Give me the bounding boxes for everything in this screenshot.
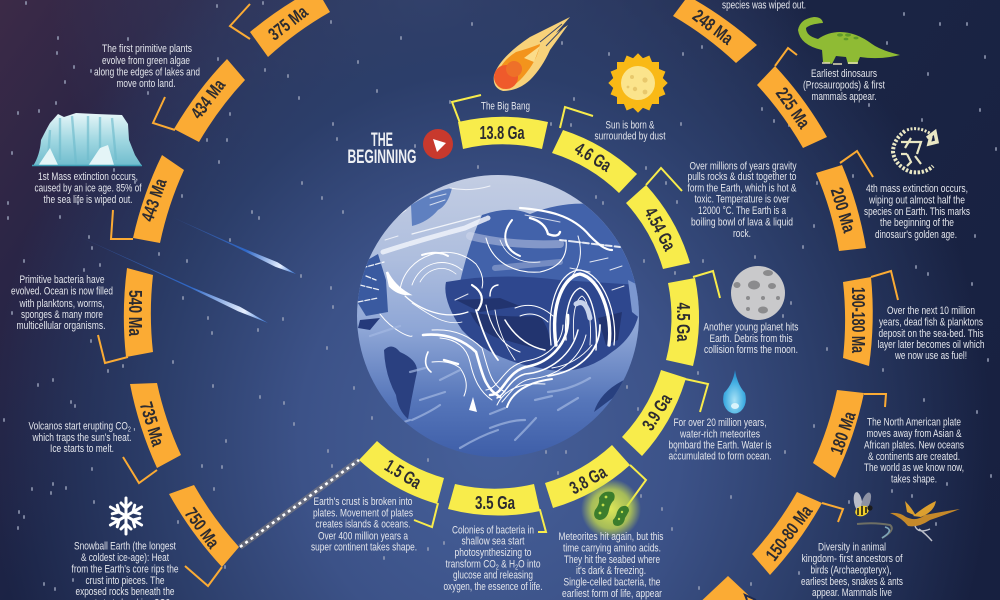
lower ocean cloud streaks (370, 326, 590, 448)
icon: water drop (723, 370, 746, 414)
segment labels (125, 1, 868, 565)
icon: moon (731, 266, 785, 320)
label: 1.5 Ga: 1.5 Ga (381, 455, 425, 493)
text: snowball earth: crust into pieces. The (86, 575, 164, 587)
icon: sun (608, 53, 668, 113)
text: diversity in animal kingdom: kingdom- first ancestors of (802, 553, 903, 565)
text: first mass extinction: caused by an ice age. 85% of (34, 182, 142, 194)
text: earth forms (688, 160, 797, 240)
icon: snowflake (108, 498, 144, 534)
text: primitive bacteria: evolved. Ocean is now filled (11, 286, 113, 298)
text: sun is born (594, 120, 666, 142)
text: crust plates: creates islands & oceans. (316, 518, 410, 530)
title: The Beginning: BEGINNING (348, 147, 416, 168)
label: 735 Ma: 735 Ma (136, 400, 168, 449)
segment: 190-180 Ma (843, 277, 873, 366)
text: crust plates: Over 400 million years a (318, 530, 408, 542)
text: water meteorites (668, 417, 772, 462)
text: diversity in animal kingdom (801, 542, 903, 599)
text: the big bang: The Big Bang (481, 100, 530, 112)
text: colonies of bacteria: 2 (496, 564, 499, 572)
text: colonies of bacteria: Colonies of bacteria in (452, 524, 534, 536)
segment: 3.9 Ga (622, 370, 686, 456)
text: crust plates (311, 496, 417, 554)
text: earliest dinosaurs (803, 68, 885, 103)
text: earliest dinosaurs: Earliest dinosaurs (811, 68, 877, 80)
text: meteorites amino acids: it's dark & freezing. (576, 565, 646, 577)
segment: 180 Ma (813, 390, 864, 478)
text: colonies of bacteria: transform CO (446, 558, 510, 570)
text: meteorites amino acids: earliest form of life, appear (562, 588, 662, 600)
text: fourth mass extinction (864, 183, 970, 241)
icon: play button (423, 129, 453, 159)
text: colonies of bacteria: glucose and releasing (453, 570, 533, 582)
text: north american plate: The world as we know now, (864, 462, 964, 474)
label: 434 Ma: 434 Ma (187, 75, 230, 123)
segment: 443 Ma (133, 155, 184, 243)
text: snowball earth: from the Earth's core rips the (72, 564, 178, 576)
icon: dinosaur fossil (893, 129, 937, 172)
segment: 540 Ma (124, 268, 153, 357)
label: 540 Ma: 540 Ma (125, 290, 145, 337)
label: 3.9 Ga: 3.9 Ga (638, 390, 676, 434)
text: earth forms: pulls rocks & dust together to (688, 171, 796, 183)
text: colonies of bacteria: O into (518, 558, 540, 570)
segment: 4.6 Ga (552, 130, 637, 193)
text: crust plates: Earth's crust is broken into (314, 496, 412, 508)
label: 180 Ma: 180 Ma (826, 408, 860, 457)
text: colonies of bacteria: shallow sea start (462, 536, 524, 548)
icon: snake (857, 523, 892, 538)
clouds and swirls (358, 186, 624, 407)
text: volcanos (28, 420, 136, 455)
text: volcanos: Ice starts to melt. (50, 443, 114, 455)
label: 190-180 Ma: 190-180 Ma (848, 287, 868, 354)
segment: 750 Ma (169, 485, 239, 567)
text: fourth mass extinction: 4th mass extinction occurs, (866, 183, 968, 195)
text: oil deposit: we now use as fuel! (894, 350, 967, 362)
text: earth forms: Over millions of years gravity (690, 160, 797, 172)
text: first mass extinction: the sea life is wiped out. (44, 194, 132, 206)
icon: bee (852, 491, 873, 518)
text: colonies of bacteria: oxygen, the essence of life. (444, 581, 543, 593)
text: first primitive plants: move onto land. (116, 78, 176, 90)
segment: 150-80 Ma (752, 492, 822, 575)
text: earth forms: 12000 °C. The Earth is a (698, 205, 786, 217)
title: The Beginning: THE (371, 130, 393, 151)
dotted connector (240, 460, 359, 547)
label: 248 Ma: 248 Ma (689, 5, 738, 49)
text: fourth mass extinction: dinosaur's golden age. (875, 229, 957, 241)
segment: 248 Ma (673, 0, 757, 63)
icon: dinosaur (798, 17, 900, 64)
text: first mass extinction: 1st Mass extinction occurs, (38, 171, 138, 183)
text: volcanos: 2 (128, 426, 131, 434)
text: meteorites amino acids: They hit the seabed where (564, 554, 660, 566)
label: 3.5 Ga: 3.5 Ga (475, 493, 516, 513)
text: volcanos: Volcanos start erupting CO (28, 420, 158, 432)
text: meteorites amino acids: Single-celled bacteria, the (564, 576, 660, 588)
text: diversity in animal kingdom: birds (Archaeopteryx), (810, 564, 892, 576)
text: water meteorites: water-rich meteorites (679, 428, 760, 440)
label: 4.5 Ga: 4.5 Ga (673, 302, 693, 342)
text: north american plate: The North American plate (867, 416, 961, 428)
orange timeline segments (124, 0, 873, 600)
text: moon forms: Earth. Debris from this (710, 333, 793, 345)
text: north american plate (864, 416, 964, 486)
text: crust plates: super continent takes shape. (311, 542, 417, 554)
label: 13.8 Ga: 13.8 Ga (480, 123, 525, 143)
text: earth forms: rock. (733, 228, 751, 240)
text: first primitive plants: The first primitive plants (102, 43, 192, 55)
text: snowball earth (72, 540, 178, 600)
label: 200 Ma: 200 Ma (827, 185, 860, 236)
icon: iceberg (32, 113, 142, 166)
text: water meteorites: For over 20 million years, (674, 417, 766, 429)
text: first primitive plants: along the edges of lakes and (94, 66, 200, 78)
text: diversity in animal kingdom: Diversity in animal (818, 542, 886, 554)
label: 750 Ma: 750 Ma (181, 504, 224, 553)
text: primitive bacteria (11, 274, 113, 332)
yellow brackets (414, 95, 720, 532)
text: earth forms: boiling bowl of lava & liquid (691, 216, 793, 228)
text: snowball earth: & coldest ice-age): Heat (81, 552, 169, 564)
text: meteorites amino acids: Meteorites hit again, but this (558, 531, 664, 543)
text: volcanos: which traps the sun's heat. (32, 432, 132, 444)
text: first mass extinction (34, 171, 142, 206)
text: fourth mass extinction: wiping out almost half the (868, 194, 965, 206)
segment: 200 Ma (816, 165, 866, 251)
yellow timeline segments (359, 117, 699, 515)
text: earliest dinosaurs: mammals appear. (812, 91, 876, 103)
text: moon forms: collision forms the moon. (704, 344, 798, 356)
segment: 3.5 Ga (448, 484, 540, 515)
earth (356, 175, 642, 457)
label: 4.6 Ga: 4.6 Ga (571, 138, 615, 176)
segment: next period (cut off) (696, 576, 760, 600)
icon: bacteria (581, 479, 641, 539)
text: sun is born: surrounded by dust (594, 130, 666, 142)
text: sun is born: Sun is born & (606, 120, 655, 132)
text: colonies of bacteria: photosynthesizing to (454, 547, 532, 559)
text: first primitive plants: evolve from green algae (102, 55, 190, 67)
text: primitive bacteria: multicellular organisms. (16, 320, 106, 332)
label: 4.54 Ga: 4.54 Ga (640, 204, 680, 255)
text: fourth mass extinction: species on Earth. This marks (864, 206, 970, 218)
label: 3.8 Ga: 3.8 Ga (566, 461, 611, 498)
text: colonies of bacteria: & H (499, 558, 515, 570)
text: first primitive plants (94, 43, 200, 90)
text: north american plate: & continents are created. (868, 451, 960, 463)
icon: comet (494, 17, 570, 91)
title: The Beginning (348, 130, 416, 168)
text: fourth mass extinction: the beginning of the (880, 217, 954, 229)
text: snowball earth: exposed rocks beneath the (76, 586, 174, 598)
segment: 225 Ma (757, 66, 827, 148)
text: meteorites amino acids (558, 531, 664, 600)
text: volcanos: , (131, 420, 136, 432)
text: snowball earth: Snowball Earth (the longest (74, 540, 176, 552)
segment: 3.8 Ga (545, 445, 630, 508)
text: earth forms: form the Earth, which is hot & (688, 182, 797, 194)
label: 443 Ma: 443 Ma (137, 175, 171, 224)
meteors (78, 217, 296, 323)
text: colonies of bacteria: 2 (515, 564, 518, 572)
text: water meteorites: accumulated to form ocean. (668, 450, 772, 462)
text: north american plate: takes shape. (891, 474, 937, 486)
segment: 13.8 Ga (458, 117, 548, 149)
text: earth forms: toxic. Temperature is over (694, 194, 790, 206)
text: water meteorites: bombard the Earth. Water is (668, 440, 772, 452)
segment: 4.5 Ga (666, 278, 699, 366)
text: earliest dinosaurs: (Prosauropods) & first (803, 80, 885, 92)
text: moon forms: Another young planet hits (704, 322, 799, 334)
text: diversity in animal kingdom: appear. Mammals live (812, 587, 892, 599)
text: oil deposit: Over the next 10 million (887, 305, 975, 317)
label: 150-80 Ma: 150-80 Ma (762, 501, 817, 565)
segment: 434 Ma (174, 59, 245, 142)
segment: 375 Ma (250, 0, 330, 57)
orange brackets (98, 4, 898, 600)
text: primitive bacteria: Primitive bacteria have (20, 274, 104, 286)
text: north american plate: African plates. New oceans (864, 440, 964, 452)
text: primitive bacteria: sponges & many more (21, 309, 103, 321)
segment: 735 Ma (130, 383, 181, 468)
text: meteorites amino acids: time carrying amino acids. (563, 542, 661, 554)
text: crust plates: plates. Movement of plates (313, 508, 413, 520)
land masses (356, 188, 642, 419)
text: moon forms (704, 322, 799, 356)
segment: 4.54 Ga (626, 185, 690, 269)
text: north american plate: moves away from Asian & (866, 428, 962, 440)
text: primitive bacteria: with planktons, worms, (19, 298, 105, 310)
text: colonies of bacteria (444, 524, 543, 593)
icon: archaeopteryx bird (890, 501, 960, 541)
text: oil deposit (878, 305, 984, 362)
segment: 1.5 Ga (359, 441, 444, 504)
text: diversity in animal kingdom: earliest bees, snakes & ants (801, 576, 903, 588)
label: 225 Ma: 225 Ma (772, 84, 815, 133)
